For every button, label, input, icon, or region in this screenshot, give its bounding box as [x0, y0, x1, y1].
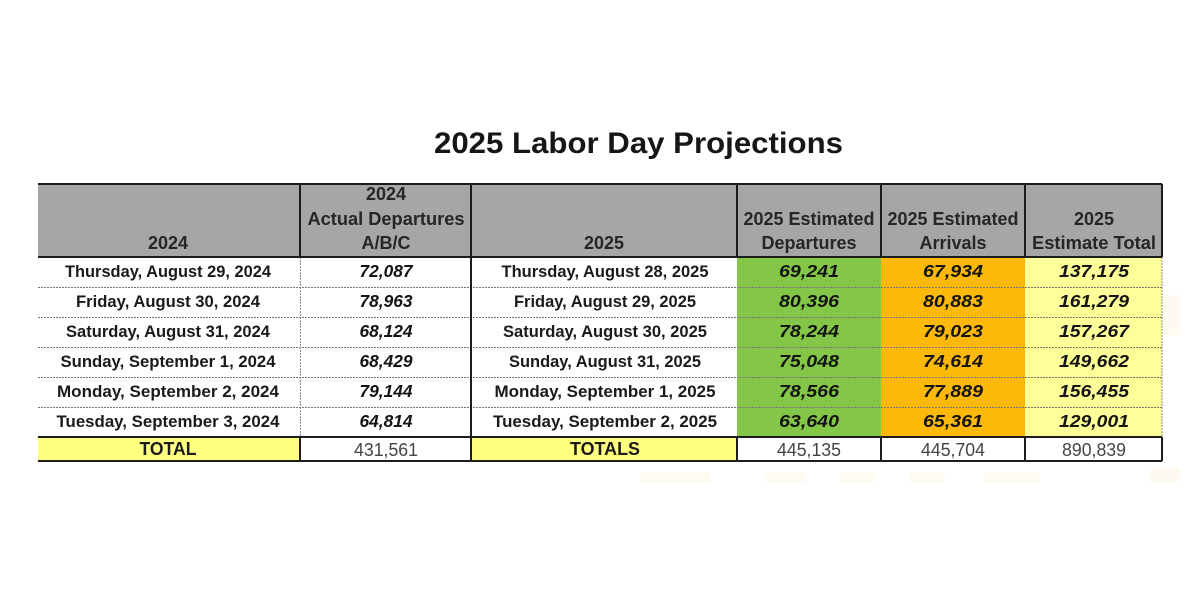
row dividers	[38, 257, 1162, 437]
column: 2024 actual departures: 68,124	[360, 321, 413, 341]
column: 2024 actual departures: 78,963	[360, 291, 413, 311]
totals row: 431,561	[354, 440, 418, 460]
column: 2025 estimated arrivals: 65,361	[923, 411, 983, 431]
column: 2025 estimated departures: 78,566	[779, 381, 839, 401]
column: 2024 dates: Sunday, September 1, 2024	[60, 353, 276, 371]
column: 2024 dates: Thursday, August 29, 2024	[65, 263, 272, 281]
column: 2025 estimated departures: 63,640	[779, 411, 839, 431]
column: 2025 estimated arrivals: 67,934	[923, 261, 983, 281]
column: 2025 dates: Saturday, August 30, 2025	[503, 323, 707, 341]
column: 2024 actual departures: 79,144	[360, 381, 413, 401]
column: 2025 estimate total: 149,662	[1059, 351, 1129, 371]
total row fills	[38, 437, 737, 461]
column: 2025 dates: Friday, August 29, 2025	[514, 293, 696, 311]
column: 2024 dates: Friday, August 30, 2024	[76, 293, 261, 311]
column: 2025 estimated departures: 80,396	[779, 291, 839, 311]
column: 2024 dates: Monday, September 2, 2024	[57, 383, 280, 401]
column: 2024 actual departures: 68,429	[360, 351, 413, 371]
column: 2025 dates: Monday, September 1, 2025	[494, 383, 716, 401]
header: 2024 actual departures	[308, 184, 464, 253]
header: 2024 actual departures: Actual Departures	[308, 209, 464, 229]
title: 2025 Labor Day Projections	[434, 127, 843, 160]
header: 2025 estimated arrivals: 2025 Estimated	[888, 209, 1018, 229]
totals row: 445,704	[921, 440, 985, 460]
column: 2025 dates	[493, 263, 717, 431]
header: 2024 actual departures: A/B/C	[362, 233, 410, 253]
column: 2025 estimate total: 129,001	[1059, 411, 1129, 431]
column: 2024 dates: Saturday, August 31, 2024	[66, 323, 271, 341]
column: 2025 estimated arrivals: 80,883	[923, 291, 983, 311]
column: 2025 estimated arrivals	[923, 261, 983, 431]
column: 2025 estimate total: 157,267	[1059, 321, 1130, 341]
column: 2025 dates: Sunday, August 31, 2025	[509, 353, 701, 371]
column: 2025 estimated departures	[779, 261, 839, 431]
column: 2025 estimated arrivals: 77,889	[923, 381, 983, 401]
column: 2025 estimated arrivals: 74,614	[923, 351, 983, 371]
column: 2025 estimate total: 137,175	[1059, 261, 1129, 281]
column: 2025 estimate total: 156,455	[1059, 381, 1129, 401]
column: 2024 actual departures	[360, 261, 414, 431]
faint background marks	[640, 295, 1180, 482]
totals row	[140, 439, 1126, 460]
totals row: TOTALS	[570, 439, 640, 459]
header row	[38, 184, 1162, 257]
column: 2025 dates: Thursday, August 28, 2025	[502, 263, 708, 281]
header: 2025 estimate total: 2025	[1074, 209, 1114, 229]
header: 2025 estimated departures	[744, 209, 874, 253]
column: 2025 estimated departures: 69,241	[779, 261, 839, 281]
header: 2024 actual departures: 2024	[366, 184, 406, 204]
table rules	[38, 184, 1162, 461]
header: 2025 estimated arrivals: Arrivals	[919, 233, 987, 253]
header: 2025 estimate total: Estimate Total	[1032, 233, 1156, 253]
header: 2025 estimated departures: 2025 Estimated	[744, 209, 874, 229]
totals row: TOTAL	[140, 439, 197, 459]
column: 2024 actual departures: 72,087	[360, 261, 414, 281]
header: 2025 date column: 2025	[584, 233, 624, 253]
header: 2025 estimated departures: Departures	[761, 233, 857, 253]
column: 2025 estimate total	[1059, 261, 1130, 431]
header: 2024 date column: 2024	[148, 233, 188, 253]
column: 2025 dates: Tuesday, September 2, 2025	[493, 413, 717, 431]
header: 2025 estimate total	[1032, 209, 1156, 253]
totals row: 445,135	[777, 440, 841, 460]
table	[38, 184, 1162, 461]
coloured data columns	[737, 257, 1162, 437]
column: 2025 estimated departures: 75,048	[779, 351, 839, 371]
column: 2025 estimated arrivals: 79,023	[923, 321, 983, 341]
column: 2025 estimate total: 161,279	[1059, 291, 1129, 311]
column: 2024 dates: Tuesday, September 3, 2024	[56, 413, 280, 431]
column: 2024 actual departures: 64,814	[360, 411, 413, 431]
column: 2025 estimated departures: 78,244	[779, 321, 839, 341]
header: 2025 estimated arrivals	[888, 209, 1018, 253]
totals row: 890,839	[1062, 440, 1126, 460]
column: 2024 dates	[56, 263, 280, 431]
